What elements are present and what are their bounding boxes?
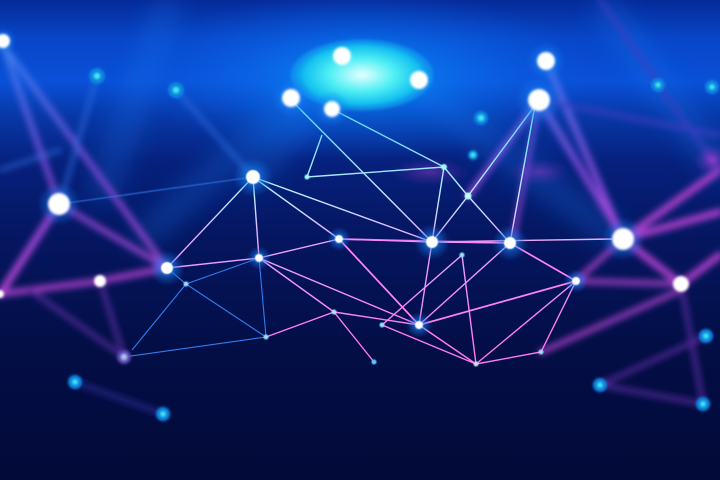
faint left line [60,177,253,204]
soft background beams [100,0,720,240]
wide blue glow [132,0,592,160]
pink haze patches [694,144,720,176]
sharp network nodes [161,164,580,366]
blue lower left lines [124,258,266,357]
sharp network lines [167,100,612,364]
small teal blurred nodes [68,68,719,421]
blurred foreground nodes [0,34,689,298]
node halos [0,27,645,338]
bright pink strands [339,239,576,325]
central light glow [290,39,434,111]
